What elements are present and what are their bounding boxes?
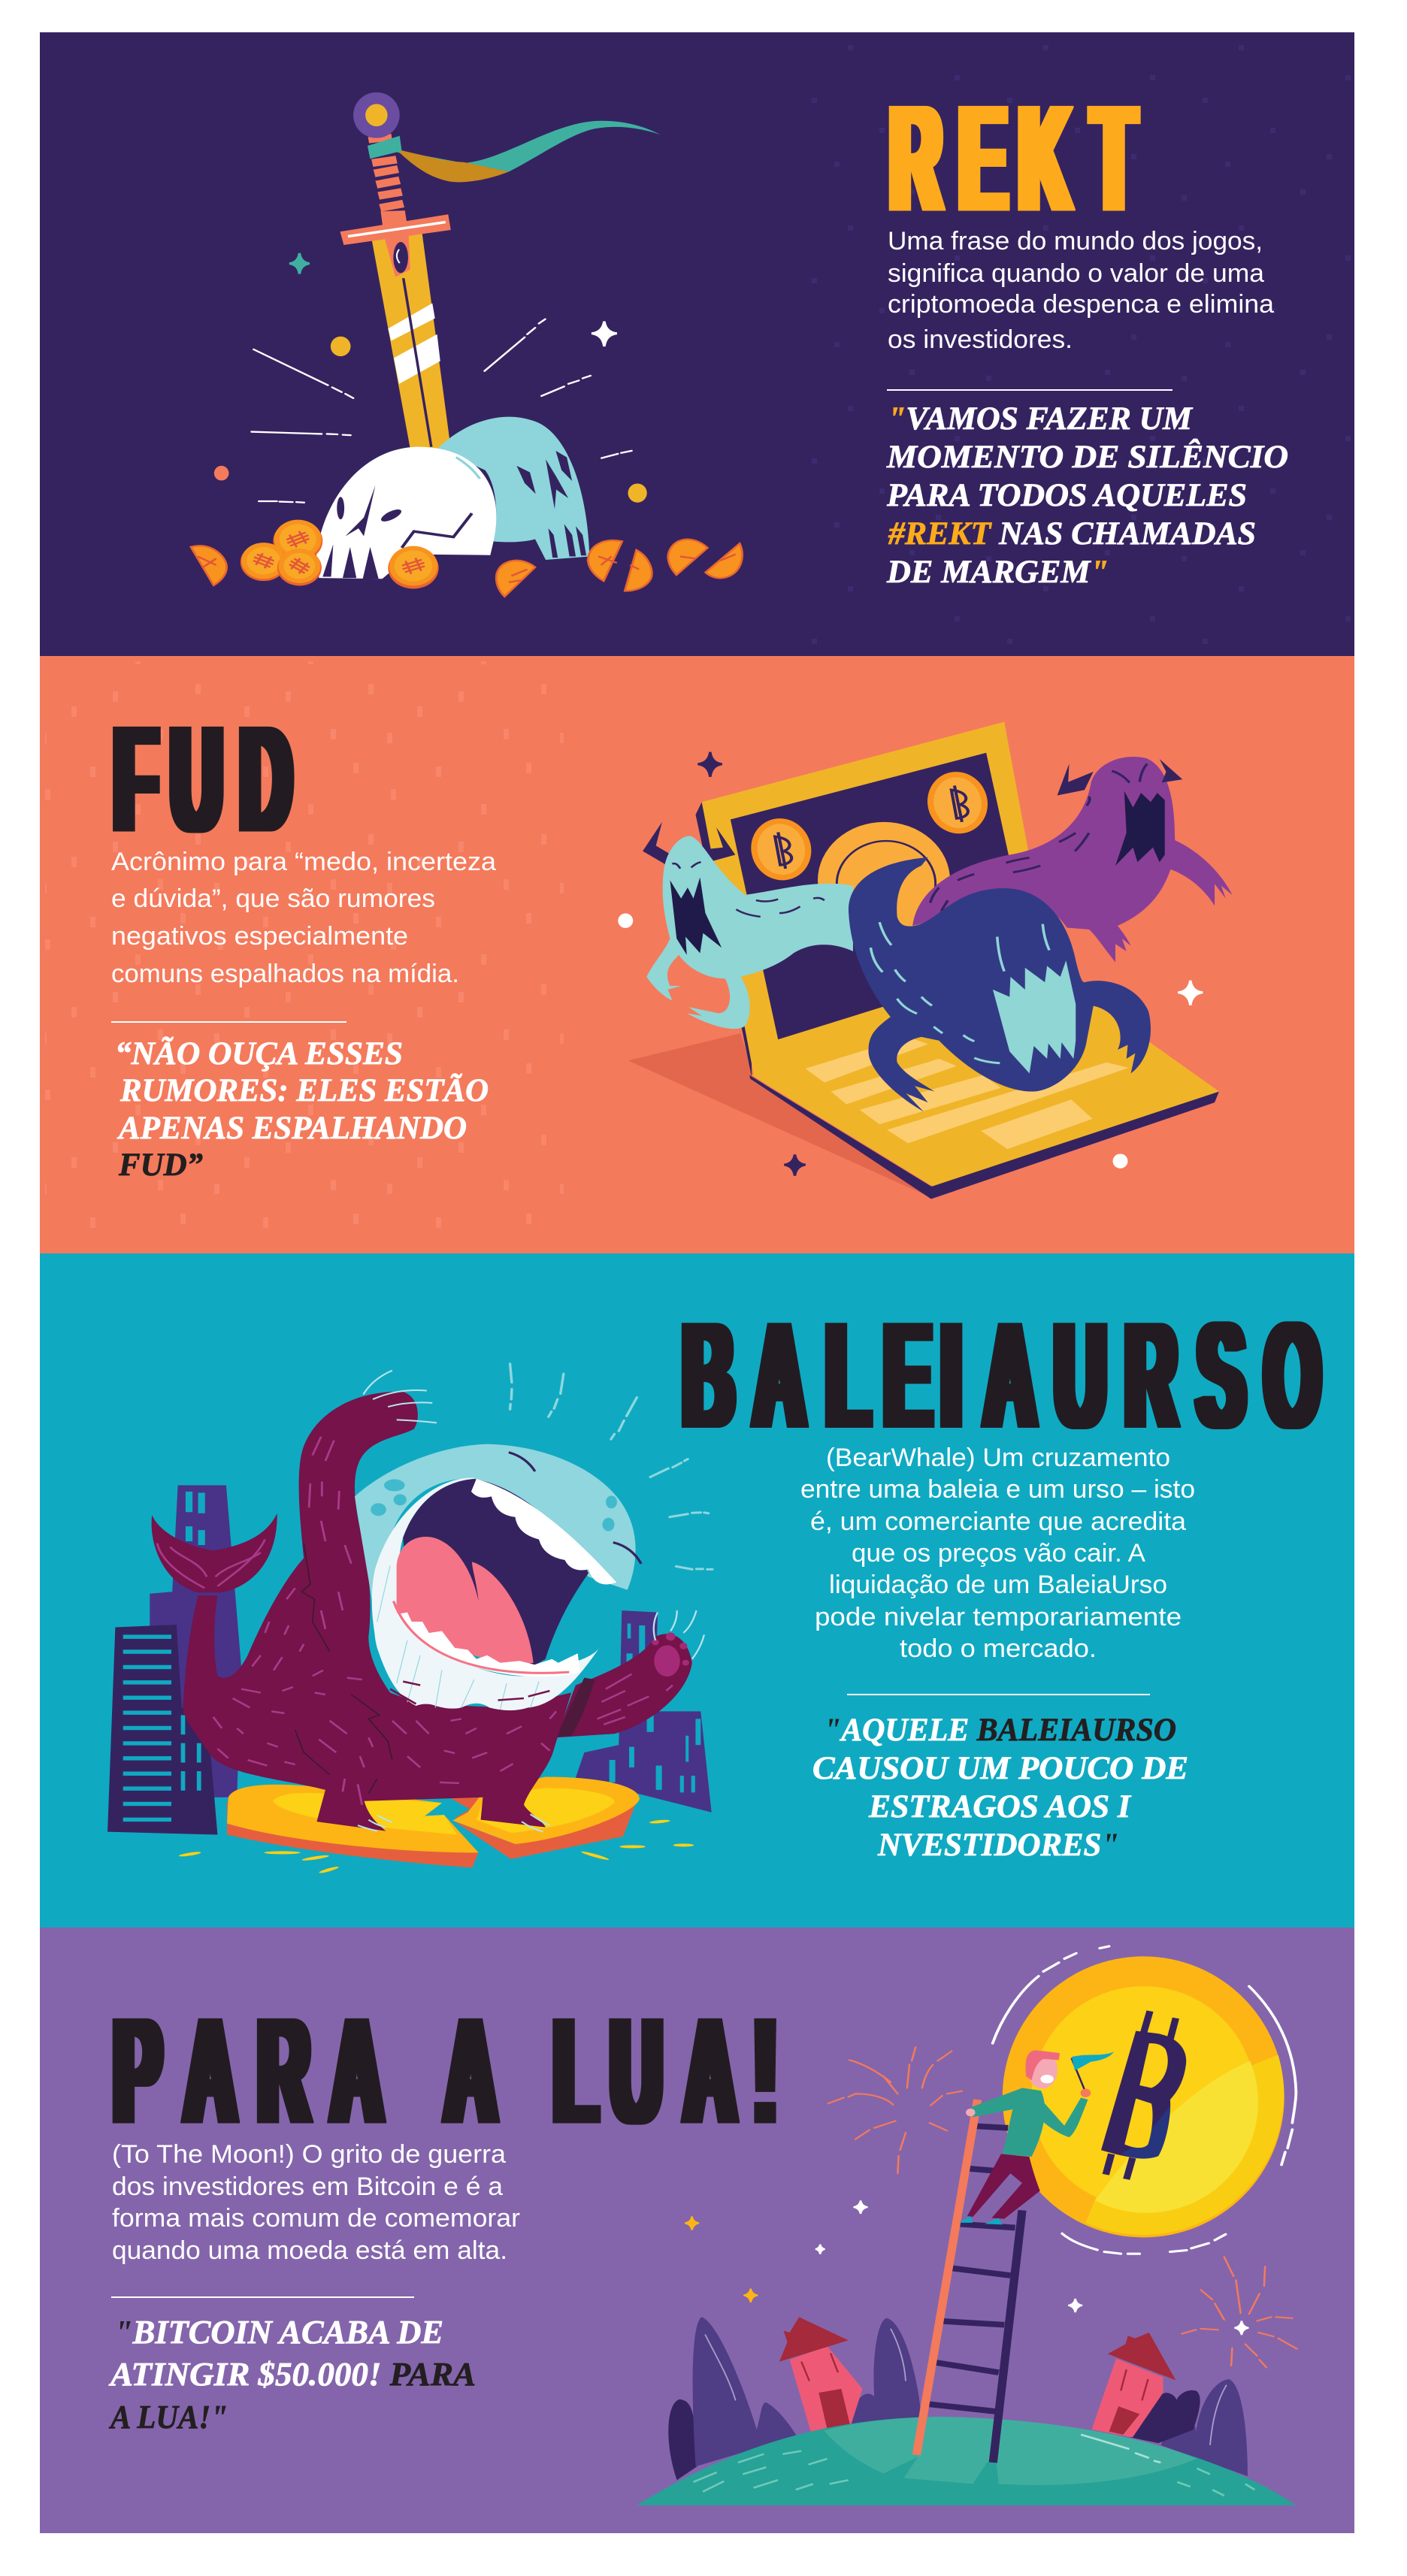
definition: FUD: negativos especialmente [111, 922, 408, 951]
definition: PARA A LUA [112, 2140, 520, 2265]
banner on sword [388, 121, 660, 182]
illustration: bear-whale monster [107, 1364, 713, 1874]
fireworks [828, 2047, 1297, 2368]
illustration: climbing to the moon coin [637, 1946, 1297, 2505]
white skull [316, 447, 496, 579]
orbit dashes [993, 1946, 1296, 2254]
definition: PARA A LUA: (To The Moon!) O grito de guerra [112, 2140, 506, 2169]
teal monster [643, 822, 853, 1029]
climber with flag [959, 2050, 1114, 2224]
right arm [556, 1610, 704, 1737]
purple monster [912, 757, 1233, 962]
trees [668, 2317, 1248, 2480]
quote: BALEIAURSO: NVESTIDORES" [877, 1828, 1119, 1863]
title: REKT: REKT [890, 75, 1136, 243]
definition: BALEIAURSO: liquidação de um BaleiaUrso [829, 1571, 1167, 1599]
bitcoin moon [1003, 1956, 1284, 2237]
quote: BALEIAURSO: CAUSOU UM POUCO DE [812, 1751, 1188, 1786]
quote: BALEIAURSO [812, 1713, 1188, 1863]
quote: BALEIAURSO: "AQUELE BALEIAURSO [824, 1713, 1176, 1748]
houses [779, 2317, 1176, 2437]
definition: REKT: Uma frase do mundo dos jogos, [888, 227, 1263, 255]
quote: REKT: "VAMOS FAZER UM [888, 401, 1194, 437]
sparkles [685, 2200, 1248, 2335]
shake lines [510, 1364, 713, 1569]
panel: BALEIAURSO [40, 1253, 1354, 1927]
definition: REKT [888, 227, 1274, 354]
title: PARA A LUA!: PARAALUA! [113, 1988, 777, 2155]
definition: BALEIAURSO: (BearWhale) Um cruzamento [826, 1444, 1170, 1472]
teal skull [437, 417, 589, 560]
title: FUD: FUD [114, 696, 291, 863]
quote: REKT [886, 401, 1288, 590]
quote: PARA A LUA: A LUA!" [108, 2399, 228, 2435]
definition: FUD: e dúvida”, que são rumores [111, 884, 435, 913]
definition: BALEIAURSO: entre uma baleia e um urso – isto [800, 1475, 1195, 1504]
whale head [355, 1444, 641, 1710]
sparkles and dots [618, 752, 1203, 1176]
quote: FUD: “NÃO OUÇA ESSES [115, 1036, 403, 1072]
quote: FUD: FUD” [118, 1147, 203, 1183]
definition: BALEIAURSO: que os preços vão cair. A [852, 1539, 1145, 1568]
definition: PARA A LUA: quando uma moeda está em alta. [112, 2236, 507, 2265]
quote: REKT: DE MARGEM" [886, 555, 1109, 590]
definition: PARA A LUA: dos investidores em Bitcoin e é a [112, 2172, 503, 2201]
illustration: monsters on laptop [618, 722, 1233, 1199]
cracked ground slab [179, 1776, 694, 1874]
ladder [916, 2100, 1022, 2463]
definition: BALEIAURSO: é, um comerciante que acredita [810, 1507, 1186, 1536]
quote: FUD: RUMORES: ELES ESTÃO [120, 1073, 489, 1108]
city buildings [107, 1485, 712, 1835]
definition: FUD: comuns espalhados na mídia. [111, 960, 459, 988]
illustration: sword in skull [191, 92, 743, 597]
definition: BALEIAURSO: pode nivelar temporariamente [815, 1603, 1182, 1631]
definition: REKT: significa quando o valor de uma [888, 259, 1264, 288]
coins on screen [747, 769, 991, 939]
coins [191, 520, 743, 597]
blue monster [849, 857, 1151, 1111]
panel: FUD [40, 656, 1354, 1253]
panel: REKT [40, 32, 1354, 656]
definition: FUD: Acrônimo para “medo, incerteza [111, 848, 496, 876]
title: BALEIAURSO: BALEIAURSO [683, 1293, 1320, 1460]
quote: PARA A LUA [108, 2314, 476, 2435]
definition: BALEIAURSO [800, 1444, 1195, 1663]
quote: FUD [115, 1036, 489, 1183]
sparkles and dots [214, 253, 647, 503]
quote: REKT: PARA TODOS AQUELES [886, 478, 1247, 513]
quote: FUD: APENAS ESPALHANDO [116, 1111, 467, 1146]
quote: PARA A LUA: "BITCOIN ACABA DE [114, 2314, 443, 2351]
definition: PARA A LUA: forma mais comum de comemorar [112, 2204, 520, 2233]
body, tail and raised arm [152, 1371, 673, 1832]
definition: FUD [111, 848, 496, 988]
hill [637, 2417, 1296, 2505]
quote: BALEIAURSO: ESTRAGOS AOS I [868, 1789, 1131, 1825]
definition: BALEIAURSO: todo o mercado. [900, 1634, 1097, 1663]
laptop [628, 722, 1219, 1199]
quote: REKT: MOMENTO DE SILÊNCIO [886, 440, 1288, 475]
sword [340, 92, 451, 449]
panel: PARA A LUA [40, 1927, 1354, 2533]
definition: REKT: os investidores. [888, 325, 1073, 354]
quote: REKT: #REKT NAS CHAMADAS [888, 516, 1256, 552]
quote: PARA A LUA: ATINGIR $50.000! PARA [108, 2356, 476, 2393]
definition: REKT: criptomoeda despenca e elimina [888, 290, 1274, 319]
motion lines [252, 319, 631, 503]
